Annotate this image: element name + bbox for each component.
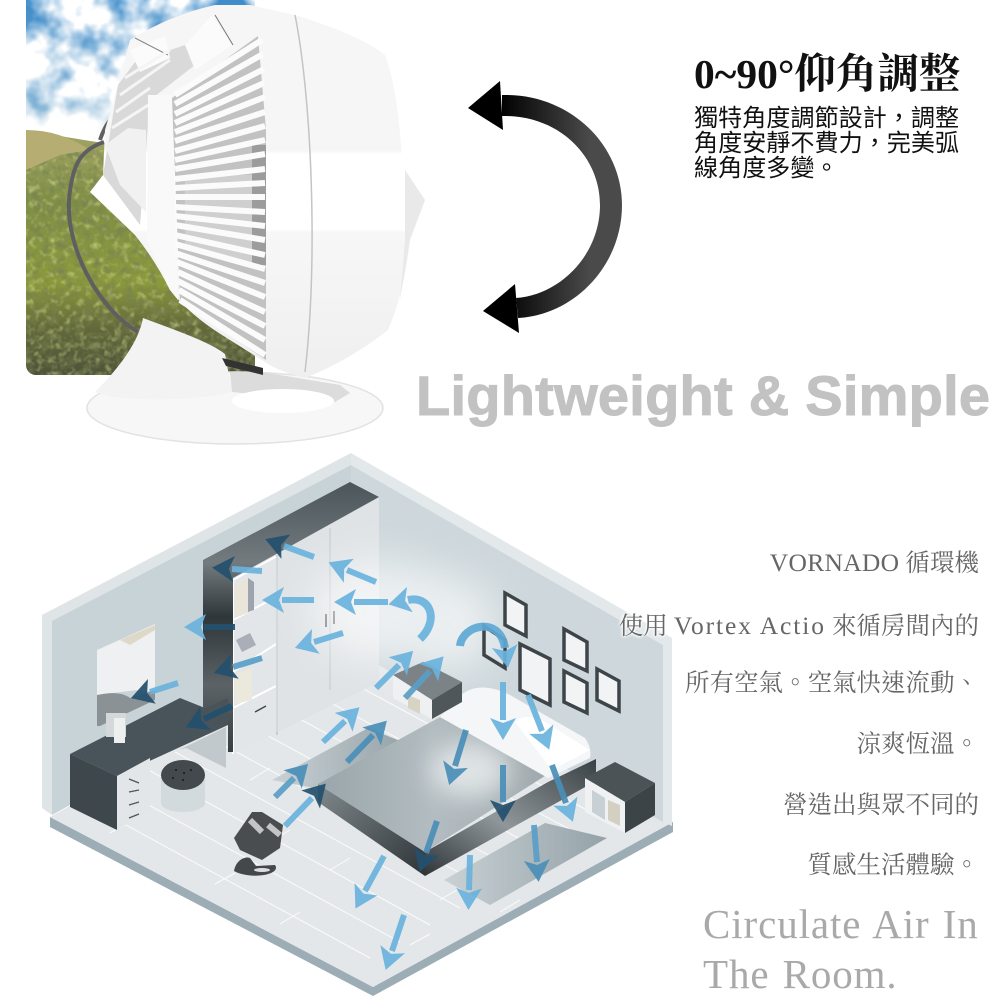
fan: main body bbox=[90, 5, 425, 378]
heading: Circulate Air In The Room bbox=[703, 901, 979, 997]
heading: Circulate Air In The Room: The Room. bbox=[703, 951, 898, 997]
dark wall band bbox=[203, 482, 379, 752]
text block: tilt description: 線角度多變。 bbox=[694, 155, 839, 182]
bedside table right bbox=[585, 762, 655, 833]
fan: wire guard bbox=[69, 100, 147, 332]
heading: Circulate Air In The Room: Circulate Air In bbox=[703, 901, 979, 947]
text: constant temperature line: 涼爽恆溫。 bbox=[856, 731, 979, 758]
wardrobe bbox=[233, 497, 379, 754]
heading: Lightweight & Simple: Lightweight & Simple bbox=[416, 364, 990, 427]
text block: tilt description: 角度安靜不費力，完美弧 bbox=[694, 130, 959, 157]
room: floor bbox=[50, 650, 673, 996]
airflow arrows bbox=[150, 546, 566, 951]
fan: rear grille shells bbox=[103, 15, 233, 300]
dresser with drawers bbox=[70, 698, 228, 830]
rugs bbox=[272, 728, 607, 905]
miniature fan bbox=[234, 812, 283, 876]
text: create distinct line: 營造出與眾不同的 bbox=[783, 792, 979, 819]
fan: louvers bbox=[172, 36, 266, 360]
text: Vortex Actio line: 使用 Vortex Actio 來循房間內的 bbox=[619, 611, 979, 640]
text: texture line: 質感生活體驗。 bbox=[808, 852, 979, 879]
fan: base bbox=[87, 318, 383, 444]
wall mirror bbox=[97, 624, 155, 726]
mist glow bbox=[310, 560, 495, 670]
bed bbox=[318, 688, 596, 876]
room: right wall bbox=[351, 453, 672, 826]
room: left wall bbox=[42, 453, 351, 815]
bedside table left bbox=[393, 662, 462, 719]
wall picture frames bbox=[484, 593, 619, 713]
round stool bbox=[161, 760, 205, 812]
landscape photo backdrop bbox=[26, 0, 255, 375]
heading: tilt angle: 0~90°仰角調整 bbox=[694, 51, 960, 97]
text: all the air line: 所有空氣。空氣快速流動、 bbox=[685, 670, 979, 697]
double-headed tilt arrow bbox=[468, 81, 622, 333]
text block: tilt description: 獨特角度調節設計，調整 bbox=[694, 105, 959, 132]
text block: tilt description bbox=[694, 105, 959, 182]
text: VORNADO line: VORNADO 循環機 bbox=[770, 548, 979, 577]
